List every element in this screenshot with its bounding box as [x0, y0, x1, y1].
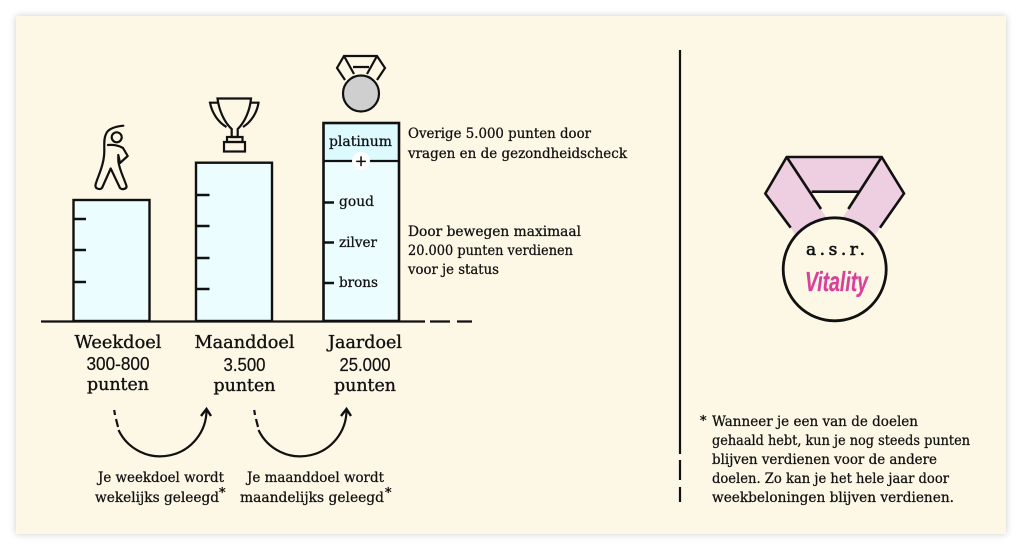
- label: jaardoel: 25.000: [340, 355, 390, 375]
- footnote: doelen. Zo kan je het hele jaar door: [712, 471, 949, 487]
- label: weekdoel: [74, 332, 162, 395]
- icon: asr vitality medal: Vitality: [805, 266, 869, 297]
- footnote: *: [700, 414, 707, 429]
- label: weekdoel: 300-800: [86, 354, 150, 374]
- footnote: [700, 414, 970, 506]
- icon: silver medal: [337, 56, 385, 112]
- caption: monthly lapse: *: [385, 486, 392, 501]
- bar: maanddoel: [196, 163, 272, 321]
- footnote: Wanneer je een van de doelen: [712, 414, 918, 430]
- bar: weekdoel: [73, 200, 150, 321]
- note: movement points: 20.000 punten verdienen: [408, 243, 573, 259]
- label: maanddoel: Maanddoel: [194, 332, 295, 353]
- bar: jaardoel: +: [355, 152, 367, 170]
- bar: jaardoel: zilver: [339, 235, 377, 251]
- vertical divider: [679, 50, 681, 502]
- caption: monthly lapse: maandelijks geleegd: [240, 490, 384, 506]
- icon: stretching person: [95, 126, 128, 189]
- label: weekdoel: Weekdoel: [74, 332, 162, 353]
- caption: monthly lapse: [240, 470, 392, 506]
- bar: jaardoel: brons: [339, 275, 378, 291]
- bar: jaardoel: platinum: [329, 134, 392, 150]
- footnote: gehaald hebt, kun je nog steeds punten: [712, 433, 970, 449]
- bar: jaardoel: [323, 123, 399, 321]
- caption: monthly lapse: Je maanddoel wordt: [245, 470, 384, 486]
- caption: weekly lapse: *: [219, 486, 226, 501]
- label: weekdoel: punten: [87, 374, 149, 395]
- icon: trophy: [210, 98, 258, 152]
- label: jaardoel: Jaardoel: [326, 332, 402, 353]
- label: maanddoel: punten: [214, 375, 276, 396]
- caption: weekly lapse: Je weekdoel wordt: [96, 470, 224, 486]
- caption: weekly lapse: wekelijks geleegd: [95, 490, 219, 506]
- label: jaardoel: [326, 332, 402, 396]
- icon: asr vitality medal: a.s.r.: [806, 240, 865, 260]
- label: jaardoel: punten: [334, 375, 396, 396]
- footnote: weekbeloningen blijven verdienen.: [712, 490, 954, 506]
- note: movement points: Door bewegen maximaal: [408, 224, 582, 240]
- caption: weekly lapse: [95, 470, 226, 506]
- bar: jaardoel: goud: [339, 194, 374, 210]
- note: platinum points: [407, 126, 627, 162]
- note: platinum points: vragen en de gezondheidscheck: [407, 146, 627, 162]
- note: platinum points: Overige 5.000 punten door: [408, 126, 591, 142]
- arrow: week to month: [114, 409, 211, 456]
- footnote: blijven verdienen voor de andere: [712, 452, 937, 468]
- label: maanddoel: [194, 332, 295, 396]
- baseline: [41, 320, 472, 323]
- icon: asr vitality medal: [765, 157, 904, 321]
- label: maanddoel: 3.500: [224, 355, 266, 375]
- arrow: month to year: [254, 409, 351, 456]
- note: movement points: [407, 224, 582, 278]
- note: movement points: voor je status: [407, 262, 499, 278]
